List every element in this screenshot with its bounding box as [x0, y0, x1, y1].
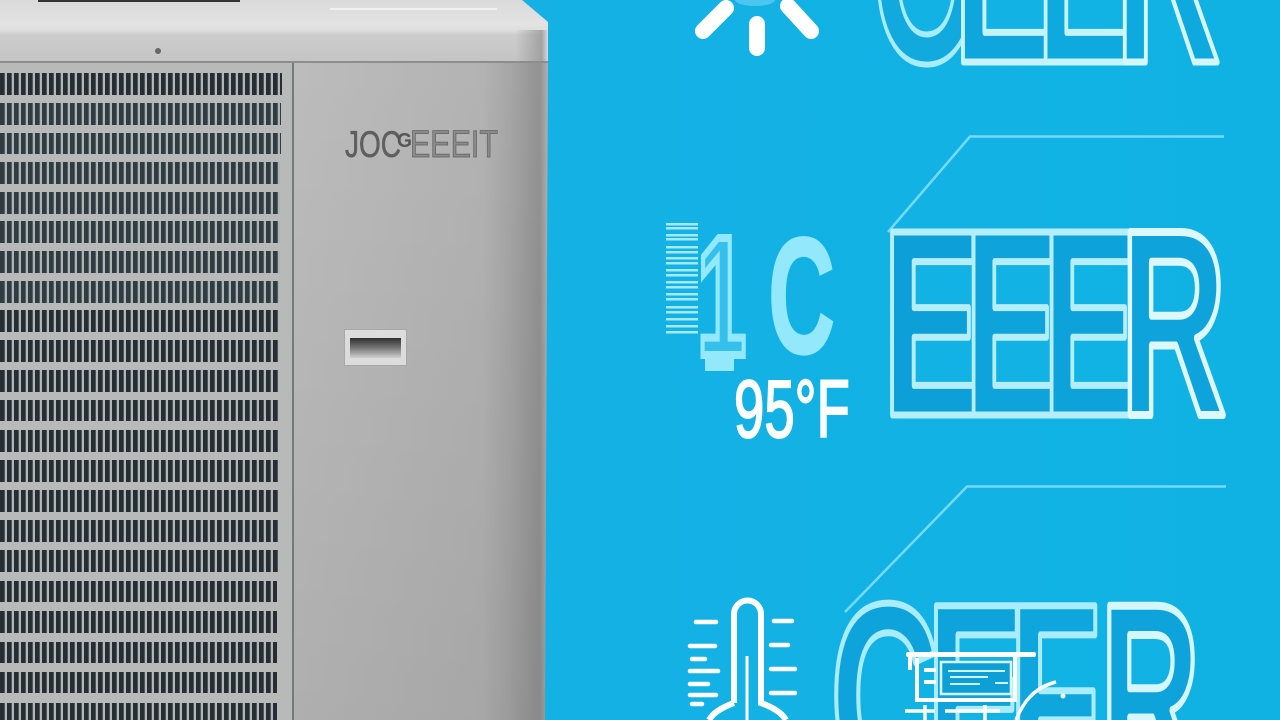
handle recess — [344, 330, 406, 366]
heading: middle EER lettering: E — [1042, 175, 1138, 472]
band screw — [155, 48, 161, 54]
label: 1C: 1 — [697, 201, 746, 391]
grille frame — [0, 63, 293, 720]
band bottom line — [0, 61, 548, 63]
side panel vertical shade — [294, 63, 548, 720]
heading: bottom EER lettering — [830, 550, 1200, 720]
icon: register device — [905, 652, 1066, 720]
icon: sun — [703, 0, 811, 48]
middle row — [666, 174, 1227, 472]
air conditioner unit — [0, 0, 548, 720]
brand logo — [345, 124, 498, 166]
brand logo: JOC — [345, 124, 401, 165]
heading: middle EER lettering — [882, 174, 1227, 472]
icon: thermometer — [690, 600, 795, 720]
unit top cap and front band — [0, 0, 548, 62]
band right corner shading — [515, 30, 548, 62]
unit side panel — [0, 0, 548, 720]
condenser fin rows — [0, 73, 282, 720]
heading: middle EER lettering: E — [964, 175, 1060, 472]
icon: barcode scale — [666, 223, 698, 334]
divider line: upper — [888, 136, 1224, 232]
bottom row — [690, 550, 1200, 720]
heading: top EER lettering — [872, 0, 1221, 119]
top cap seam — [330, 8, 497, 10]
brand logo: EEEIT — [410, 124, 498, 166]
label: 1C: C — [768, 202, 835, 389]
grille right edge — [292, 63, 294, 720]
heading: middle EER lettering: E — [882, 174, 982, 472]
heading: middle EER lettering: R — [1120, 174, 1227, 472]
divider line: lower — [845, 486, 1226, 612]
label: 1C — [697, 201, 835, 391]
top row — [703, 0, 1221, 119]
temperature: 95°F: 95°F — [734, 363, 850, 455]
brand logo: G — [397, 130, 412, 152]
top fan opening — [38, 0, 240, 2]
